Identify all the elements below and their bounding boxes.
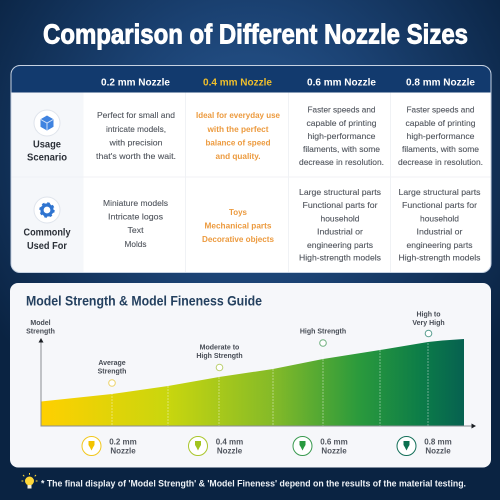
uses: 0.4 mm: Mechanical parts: [204, 220, 272, 230]
marker: average strength: [98, 360, 126, 386]
legend: 0.4 mm nozzle: Nozzle: [217, 446, 243, 456]
legend: 0.6 mm nozzle: [293, 436, 348, 456]
marker: high to very high: High to: [416, 312, 441, 318]
usage: 0.8 mm: high-performance: [406, 131, 475, 141]
usage: 0.2 mm: that's worth the wait.: [96, 151, 176, 161]
legend: 0.2 mm nozzle: Nozzle: [110, 446, 136, 456]
uses: 0.8 mm: Large structural parts: [398, 187, 480, 197]
marker: average strength: Strength: [98, 368, 126, 376]
marker: moderate to high: [196, 344, 243, 371]
usage: 0.8 mm: Faster speeds and: [406, 104, 475, 114]
row label: commonly used for: [24, 197, 71, 252]
row label: usage scenario: [27, 110, 67, 164]
uses: 0.8 mm: household: [420, 214, 459, 224]
uses: 0.8 mm: engineering parts: [406, 240, 472, 250]
uses: 0.6 mm: Large structural parts: [299, 187, 381, 197]
y axis label: [26, 320, 55, 336]
marker: moderate to high: Moderate to: [200, 344, 239, 352]
panel: strength guide: [10, 283, 491, 468]
usage: 0.6 mm: high-performance: [308, 131, 376, 141]
legend: 0.6 mm nozzle: 0.6 mm: [320, 438, 348, 446]
guide heading: Model Strength & Model Fineness Guide: [26, 292, 262, 308]
legend: 0.8 mm nozzle: 0.8 mm: [424, 438, 452, 446]
legend: 0.6 mm nozzle: Nozzle: [321, 446, 347, 456]
icon: cube: [34, 110, 60, 136]
legend: 0.8 mm nozzle: [397, 436, 452, 456]
usage: 0.8 mm: decrease in resolution.: [398, 157, 483, 167]
usage: 0.6 mm: [299, 104, 384, 167]
usage: 0.2 mm: Perfect for small and: [97, 110, 175, 120]
usage: 0.8 mm: capable of printing: [406, 118, 476, 128]
uses: 0.4 mm: Toys: [229, 207, 247, 217]
marker: high strength: [300, 328, 346, 346]
uses: 0.6 mm: Industrial or: [317, 226, 363, 236]
usage: 0.2 mm: intricate models,: [106, 124, 166, 134]
usage: 0.2 mm: [96, 110, 176, 161]
usage: 0.6 mm: capable of printing: [306, 118, 377, 128]
uses: 0.2 mm: Intricate logos: [108, 212, 163, 222]
marker: high strength: High Strength: [300, 328, 346, 336]
uses: 0.8 mm: [398, 187, 480, 262]
uses: 0.8 mm: Industrial or: [416, 226, 463, 236]
uses: 0.2 mm: Molds: [124, 239, 146, 249]
uses: 0.6 mm: High-strength models: [299, 252, 381, 262]
uses: 0.6 mm: [299, 187, 381, 262]
table header row: 0.2 mm Nozzle: [101, 76, 170, 88]
uses: 0.6 mm: Functional parts for: [302, 200, 378, 210]
marker: high to very high: [412, 312, 445, 337]
row label: commonly used for: Commonly: [24, 228, 71, 238]
table header row: 0.6 mm Nozzle: [307, 76, 376, 88]
usage: 0.4 mm: Ideal for everyday use: [196, 110, 280, 120]
uses: 0.6 mm: engineering parts: [307, 240, 373, 250]
legend: 0.8 mm nozzle: Nozzle: [425, 446, 451, 456]
legend: 0.4 mm nozzle: 0.4 mm: [216, 438, 243, 446]
uses: 0.4 mm: Decorative objects: [202, 234, 274, 244]
row label: usage scenario: Usage: [33, 140, 61, 150]
axes: [38, 338, 476, 428]
table header row: 0.8 mm Nozzle: [406, 76, 475, 88]
usage: 0.8 mm: [398, 104, 483, 167]
uses: 0.8 mm: High-strength models: [398, 252, 480, 262]
area chart: [26, 312, 476, 428]
marker: moderate to high: High Strength: [196, 353, 243, 360]
marker: average strength: Average: [98, 360, 126, 367]
usage: 0.4 mm: [196, 110, 280, 161]
row label: usage scenario: Scenario: [27, 152, 67, 164]
icon: gear: [34, 197, 60, 223]
icon: light bulb: [22, 473, 38, 488]
usage: 0.6 mm: decrease in resolution.: [299, 157, 384, 167]
usage: 0.2 mm: with precision: [108, 138, 163, 148]
table header row: 0.4 mm Nozzle: [203, 76, 272, 88]
table header row: [101, 76, 475, 88]
legend: 0.2 mm nozzle: 0.2 mm: [109, 438, 137, 446]
usage: 0.4 mm: and quality.: [216, 151, 260, 161]
usage: 0.6 mm: filaments, with some: [303, 144, 380, 154]
legend: 0.2 mm nozzle: [82, 436, 137, 456]
panel: comparison table: [11, 66, 491, 272]
row label: commonly used for: Used For: [27, 241, 67, 252]
usage: 0.4 mm: with the perfect: [207, 124, 269, 134]
legend: 0.4 mm nozzle: [188, 436, 243, 456]
usage: 0.6 mm: Faster speeds and: [308, 104, 376, 114]
footnote: * The final display of 'Model Strength' & 'Model Fineness' depend on the results of the material testing.: [41, 478, 466, 490]
uses: 0.8 mm: Functional parts for: [402, 200, 477, 210]
usage: 0.4 mm: balance of speed: [206, 138, 270, 148]
marker: high to very high: Very High: [412, 320, 445, 327]
uses: 0.4 mm: [202, 207, 274, 244]
y axis label: Strength: [26, 328, 55, 336]
uses: 0.6 mm: household: [320, 214, 360, 224]
uses: 0.2 mm: [103, 198, 168, 249]
uses: 0.2 mm: Miniature models: [103, 198, 168, 208]
usage: 0.8 mm: filaments, with some: [402, 144, 479, 154]
uses: 0.2 mm: Text: [128, 225, 144, 235]
y axis label: Model: [30, 320, 51, 327]
